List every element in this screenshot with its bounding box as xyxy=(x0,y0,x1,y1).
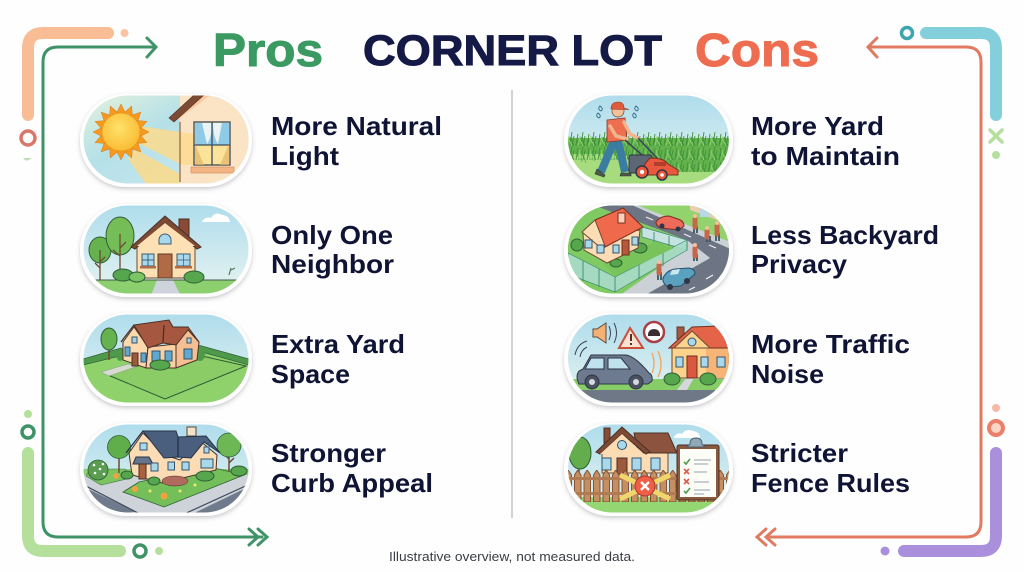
light green dot left xyxy=(24,410,32,418)
coral ring xyxy=(21,131,35,145)
bottom double arrowhead xyxy=(757,529,775,545)
bottom double arrowhead xyxy=(249,529,267,545)
heading: Corner Lot: CORNER LOT xyxy=(363,27,662,75)
title row xyxy=(213,24,819,76)
pro 3: extra yard space xyxy=(80,313,405,407)
label: Fence Rules xyxy=(751,468,910,498)
label: More Traffic xyxy=(751,329,910,359)
heading: Cons: Cons xyxy=(695,24,819,76)
pill icon: car noise near house xyxy=(564,313,733,407)
label: Stronger xyxy=(271,438,386,468)
label: Only One xyxy=(271,220,393,250)
pill icon: landscaped house xyxy=(80,423,252,517)
pro 1: more natural light xyxy=(80,94,442,188)
con 1: more yard to maintain xyxy=(564,94,900,188)
pill icon: fence with rules clipboard xyxy=(564,423,733,517)
pill icon: man mowing lawn xyxy=(564,94,733,188)
green ring left xyxy=(22,426,34,438)
green ring bottom xyxy=(134,545,146,557)
pro 2: only one neighbor xyxy=(80,204,394,298)
pill icon: house on wide lawn xyxy=(80,313,252,407)
con 2: less backyard privacy xyxy=(564,204,939,298)
frame: cons side decorations xyxy=(757,28,1003,556)
top arrowhead xyxy=(147,38,156,57)
top arrowhead xyxy=(868,38,877,57)
label: Noise xyxy=(751,359,824,389)
light green dot bottom xyxy=(155,547,163,555)
pale green dot xyxy=(992,151,1000,159)
label: Light xyxy=(271,141,339,171)
center divider xyxy=(511,90,513,518)
label: Stricter xyxy=(751,438,848,468)
purple dot xyxy=(880,546,890,556)
label: Neighbor xyxy=(271,249,394,279)
purple corner bar xyxy=(904,453,996,551)
frame: pros side decorations xyxy=(21,29,267,557)
label: to Maintain xyxy=(751,141,900,171)
con 4: stricter fence rules xyxy=(564,423,910,517)
light green corner bar xyxy=(28,453,120,551)
teal ring xyxy=(902,28,912,38)
con 3: more traffic noise xyxy=(564,313,910,407)
label: More Natural xyxy=(271,111,442,141)
pill icon: sun shining through window xyxy=(80,94,252,188)
orange dot xyxy=(120,29,128,37)
label: Less Backyard xyxy=(751,220,939,250)
small pale green mark xyxy=(23,158,31,160)
label: Curb Appeal xyxy=(271,468,433,498)
pro 4: stronger curb appeal xyxy=(80,423,433,517)
pale green x mark xyxy=(990,130,1002,142)
heading: Pros: Pros xyxy=(213,24,323,76)
pink dot xyxy=(992,404,1000,412)
blue corner bar xyxy=(926,33,996,115)
footnote: Illustrative overview, not measured data. xyxy=(389,549,635,564)
label: Extra Yard xyxy=(271,329,405,359)
coral ring right xyxy=(989,421,1003,435)
pill icon: exposed yard beside street xyxy=(564,204,733,298)
pill icon: house with trees xyxy=(80,204,252,298)
label: Privacy xyxy=(751,249,848,279)
green frame line with arrow xyxy=(43,47,262,537)
label: More Yard xyxy=(751,111,884,141)
coral frame line with arrow xyxy=(770,47,981,537)
orange corner bar xyxy=(28,33,108,115)
label: Space xyxy=(271,359,350,389)
